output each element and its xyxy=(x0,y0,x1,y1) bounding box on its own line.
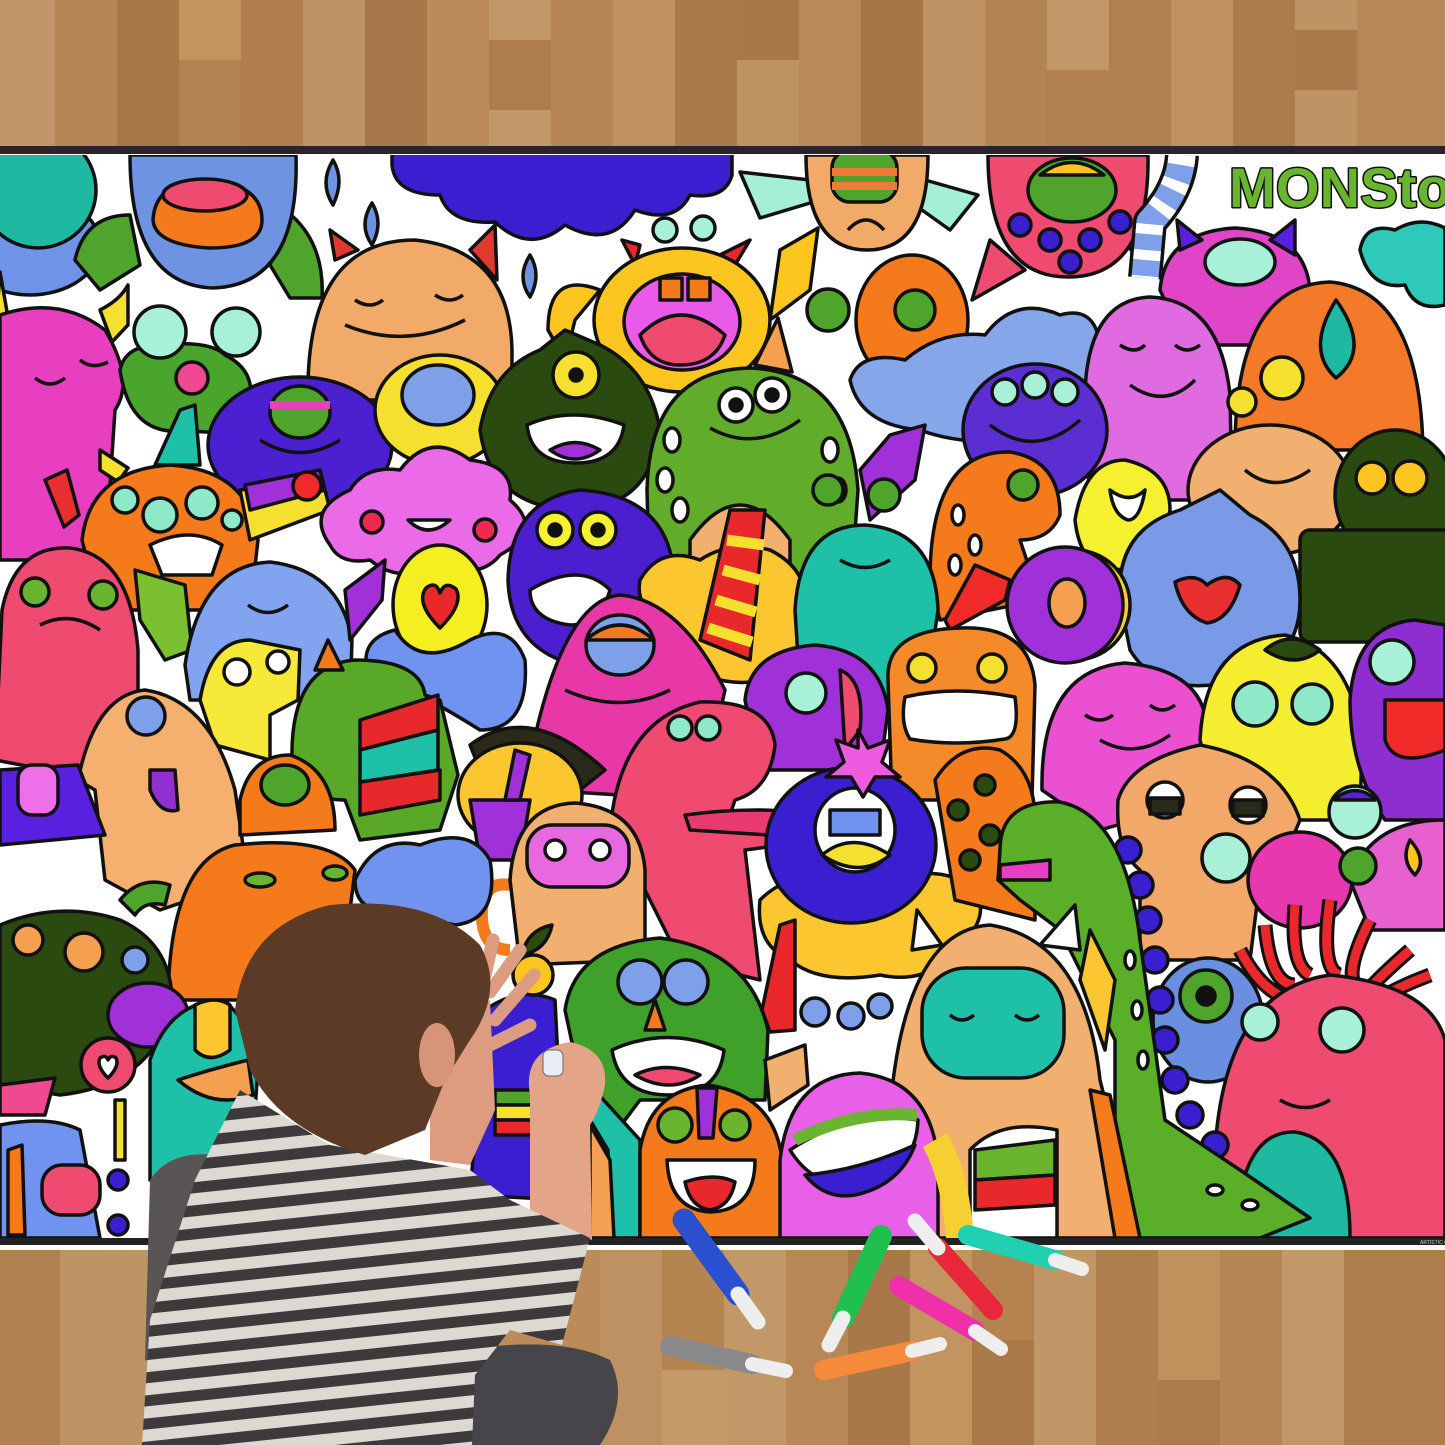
cloud: indigo xyxy=(392,150,732,239)
marker: green xyxy=(829,1236,881,1345)
striped arm: red and yellow xyxy=(700,510,765,660)
monster: light blue arms xyxy=(185,560,385,700)
monster: orange with dots xyxy=(935,748,1035,920)
monster: orange drop xyxy=(1228,282,1423,450)
monster: indigo three eyes xyxy=(963,364,1107,496)
yellow antennae xyxy=(98,448,130,480)
near leg xyxy=(145,1154,235,1370)
monster: orange teeth xyxy=(888,628,1035,800)
monster: magenta left xyxy=(0,308,123,560)
monster: green dino xyxy=(998,802,1310,1238)
monster: yellow small dino xyxy=(200,640,300,760)
monster: indigo furry xyxy=(508,490,672,660)
monster: purple red mouth xyxy=(1350,620,1445,820)
forearm and hand xyxy=(529,1042,605,1240)
monster: blue top xyxy=(75,155,322,298)
monster: red dino xyxy=(610,702,820,980)
bar: purple left xyxy=(0,765,105,845)
monster: blue eye bottom xyxy=(1153,958,1263,1082)
monster: blue ball xyxy=(1329,786,1381,838)
monster: big green xyxy=(647,368,925,600)
monster: pink horned top xyxy=(1160,220,1310,345)
monster: red tentacled xyxy=(1215,900,1445,1238)
striped tail xyxy=(935,1127,1057,1238)
monster: yellow flower xyxy=(639,547,808,682)
monster: red spider xyxy=(972,155,1165,300)
heart bird xyxy=(81,1038,135,1092)
orange loops xyxy=(482,880,688,955)
yellow horn xyxy=(100,285,128,342)
rainbow arcs xyxy=(590,1085,640,1238)
monster: orange frown xyxy=(168,843,355,1000)
monster: dark green left xyxy=(0,882,172,1095)
monster: peach right xyxy=(1188,425,1352,555)
tall red hand xyxy=(762,920,795,1032)
monster: purple furry center xyxy=(745,645,888,770)
balloon: yellow heart xyxy=(393,545,487,665)
monster: peach top with wings xyxy=(740,150,978,250)
cloud: teal xyxy=(1360,222,1445,306)
green eye stalks xyxy=(813,475,900,511)
marker: red xyxy=(915,1221,993,1310)
monster: teal balloon xyxy=(0,155,98,314)
monster: orange small xyxy=(240,755,335,835)
monster: indigo behind hand xyxy=(470,925,565,1200)
cloud: blue lower xyxy=(355,838,492,925)
donut xyxy=(1007,547,1130,663)
eye stalks xyxy=(801,994,892,1029)
hair xyxy=(235,903,490,1155)
monster: pink cloud xyxy=(321,447,525,574)
circle: orange xyxy=(805,253,970,360)
monster: light blue furry xyxy=(1120,490,1300,686)
cake slice xyxy=(240,470,330,540)
monster: magenta triangle xyxy=(528,595,725,800)
wood floor top xyxy=(0,0,1445,146)
cloud: blue xyxy=(366,630,525,730)
monster: indigo donut xyxy=(766,730,936,923)
monster: yellow ring xyxy=(548,216,818,392)
marker: blue xyxy=(684,1220,758,1322)
marker in hand xyxy=(543,1050,563,1076)
monster: pink open mouth xyxy=(780,1073,938,1238)
monster: blue bottom left xyxy=(0,1078,128,1238)
monster: indigo cyclops xyxy=(208,377,392,513)
monster: peach yeti xyxy=(890,905,1140,1238)
drops xyxy=(326,160,536,297)
striped arm xyxy=(1145,155,1182,278)
monster: violet pink xyxy=(1085,297,1232,500)
marker: gray xyxy=(670,1346,786,1371)
orange hand xyxy=(765,1045,808,1110)
fingers on poster xyxy=(485,940,534,1045)
monster: peach smiling xyxy=(308,225,512,400)
monster: peach furry right xyxy=(1118,745,1300,960)
monster: orange mohawk xyxy=(640,1085,782,1238)
shirt xyxy=(142,1090,590,1445)
monster: red left xyxy=(0,548,138,780)
monster: purple small xyxy=(108,947,188,1047)
marker: pink xyxy=(899,1286,1001,1349)
monster: pink smile xyxy=(1042,663,1207,830)
monster: yellow grin xyxy=(1075,460,1170,570)
ear xyxy=(419,1023,455,1087)
monster: dark green furry xyxy=(480,330,660,510)
marker: teal xyxy=(968,1235,1082,1269)
striped arm left xyxy=(135,570,192,660)
monster: peach pink face xyxy=(510,803,645,965)
monster: yellow under donut xyxy=(759,873,981,978)
boy xyxy=(142,903,618,1445)
monster: orange many eyes xyxy=(45,465,258,610)
wood floor bottom xyxy=(0,1245,1445,1445)
poster paper xyxy=(0,146,1445,1250)
monster: teal smiling xyxy=(795,525,938,700)
monster: dark green right xyxy=(1300,430,1445,642)
poster artwork xyxy=(0,132,1445,1238)
monster: pink right xyxy=(1248,820,1445,930)
cloud: light blue xyxy=(850,308,1100,441)
face xyxy=(430,1000,495,1165)
monster: teal left xyxy=(150,1000,260,1180)
monster: green blue eyes xyxy=(565,938,768,1140)
monster: green with mint eyes xyxy=(120,306,260,465)
dino back bumps xyxy=(1115,837,1228,1158)
monster: green stripes xyxy=(292,640,458,840)
monster: peach tongue xyxy=(78,690,248,910)
monster: orange side xyxy=(930,452,1060,630)
far leg xyxy=(465,1344,618,1445)
marker: orange xyxy=(824,1344,940,1370)
monster: yellow spiky hair xyxy=(458,727,605,860)
monster: yellow glasses xyxy=(1200,635,1362,820)
monster: yellow dotted xyxy=(375,355,505,465)
